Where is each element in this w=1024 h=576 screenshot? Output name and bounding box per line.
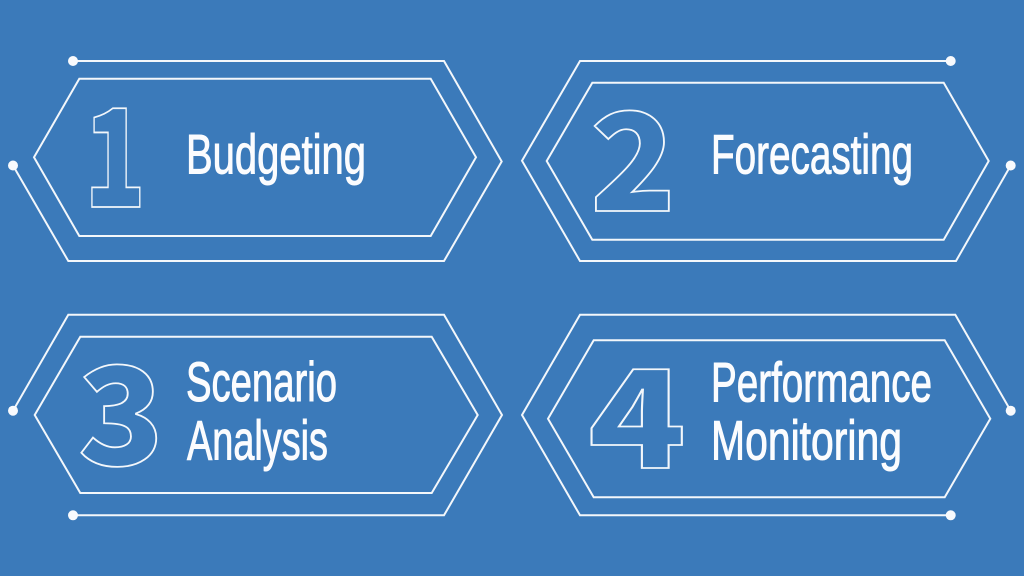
label: Scenario Analysis: Analysis <box>187 409 328 471</box>
number 3: 3 <box>78 308 164 505</box>
number 4: 4 <box>588 311 686 508</box>
number 2: 2 <box>590 54 676 251</box>
inner hexagon <box>35 337 478 493</box>
label: Scenario Analysis: Scenario <box>186 351 337 413</box>
label: Scenario Analysis <box>186 351 337 471</box>
label: Budgeting: Budgeting <box>186 124 366 186</box>
panel: budgeting <box>8 50 502 261</box>
outer circuit line with dots <box>8 56 502 261</box>
inner hexagon <box>34 79 476 236</box>
panel: performance monitoring <box>522 311 1016 520</box>
panel: scenario analysis <box>8 308 502 520</box>
label: Performance Monitoring: Performance <box>711 352 932 414</box>
number 1: 1 <box>84 50 146 247</box>
inner hexagon <box>548 340 990 497</box>
inner hexagon <box>547 83 989 240</box>
outer circuit line with dots <box>522 56 1016 261</box>
label: Forecasting: Forecasting <box>711 124 913 186</box>
outer circuit line with dots <box>522 315 1016 520</box>
label: Performance Monitoring <box>711 352 932 472</box>
label: Performance Monitoring: Monitoring <box>711 410 902 472</box>
panel: forecasting <box>522 54 1016 261</box>
outer circuit line with dots <box>8 315 502 520</box>
